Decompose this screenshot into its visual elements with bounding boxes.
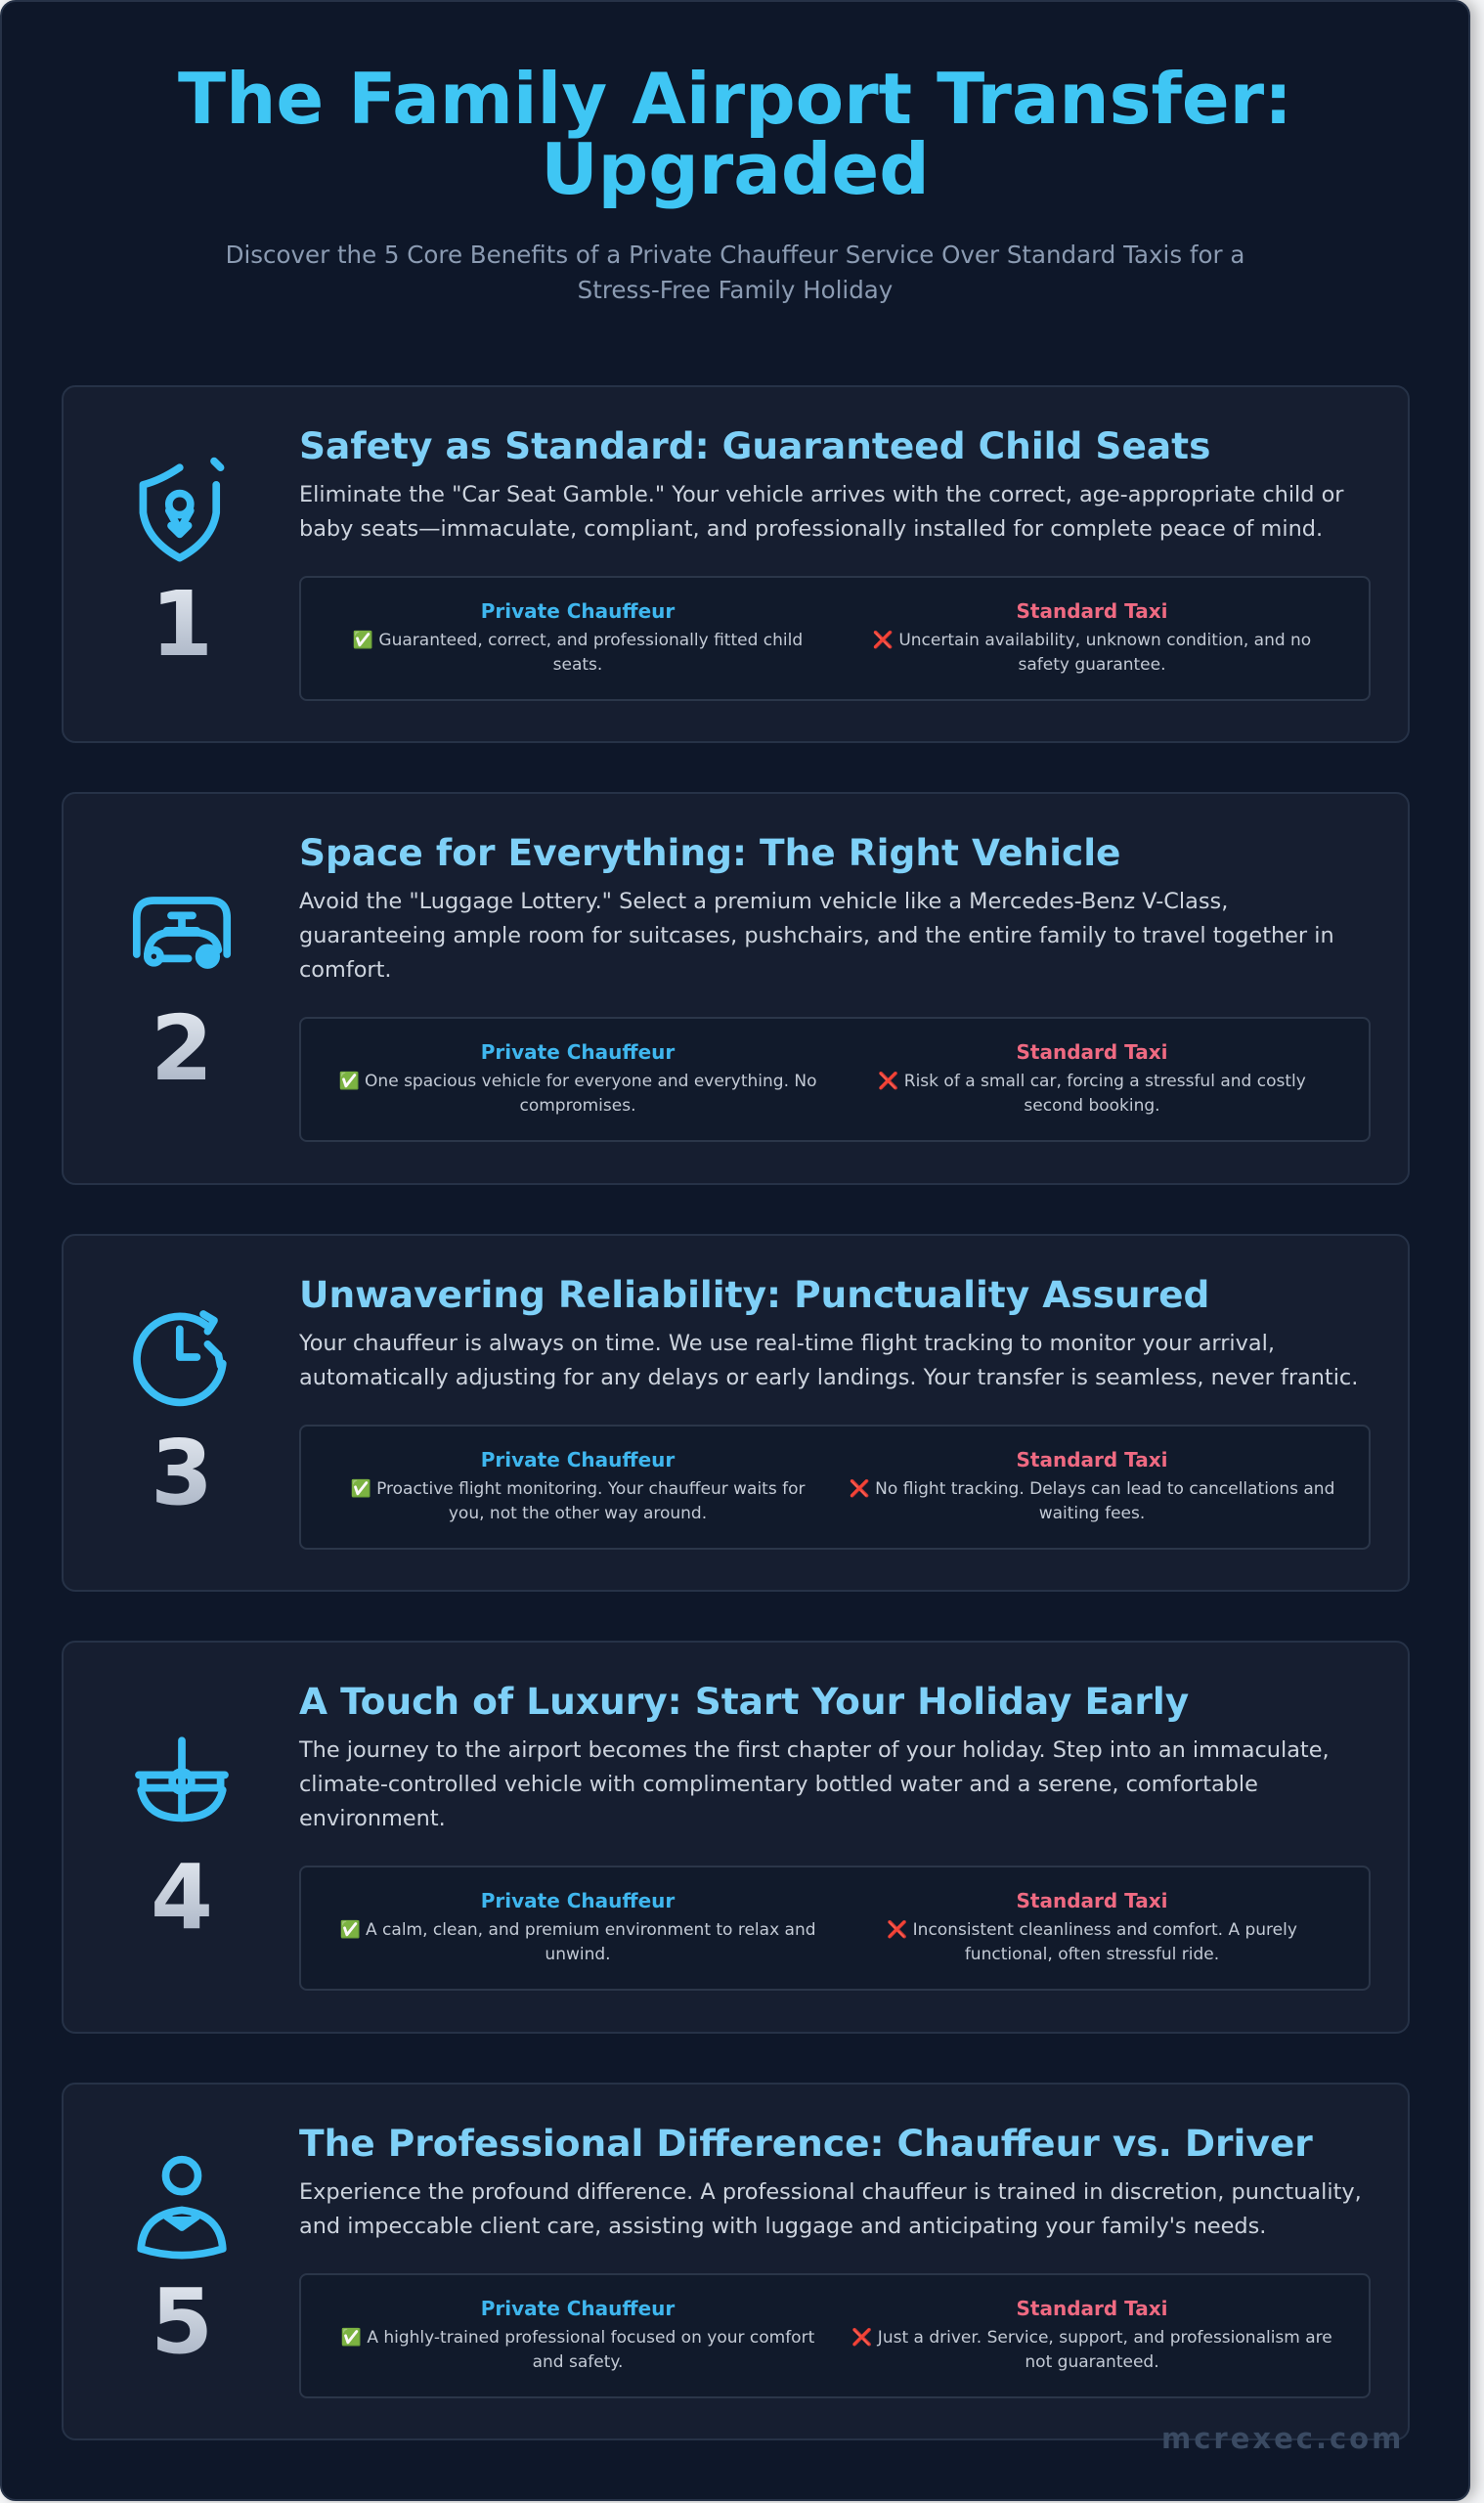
text block: Your chauffeur is always on time. We use real-time flight tracking to monitor your arrival, automatically adjusting for any delays or early landings. Your transfer is seamless, never frantic. <box>299 1331 1358 1390</box>
text block: Experience the profound difference. A professional chauffeur is trained in discretion, punctuality, and impeccable client care, assisting with luggage and anticipating your family's needs. <box>299 2179 1362 2239</box>
comparison box: Private Chauffeur <box>481 599 675 623</box>
comparison box: ❌ Inconsistent cleanliness and comfort. A purely functional, often stressful ride. <box>887 1920 1297 1964</box>
comparison box <box>299 2273 1371 2398</box>
panel: card 4 <box>62 1641 1410 2034</box>
text block: Eliminate the "Car Seat Gamble." Your vehicle arrives with the correct, age-appropriate child or baby seats—immaculate, compliant, and professionally installed for complete peace of mind. <box>299 482 1343 542</box>
watermark: mcrexec.com <box>1161 2422 1404 2455</box>
panel: card 3 <box>62 1234 1410 1592</box>
comparison box: Standard Taxi <box>1017 599 1167 623</box>
title <box>178 58 1292 210</box>
comparison box: Private Chauffeur <box>481 2297 675 2320</box>
text block: Avoid the "Luggage Lottery." Select a premium vehicle like a Mercedes-Benz V-Class, guaranteeing ample room for suitcases, pushchairs, and the entire family to travel together in comfort. <box>299 889 1334 983</box>
comparison box: Standard Taxi <box>1017 1040 1167 1064</box>
comparison box <box>299 1425 1371 1550</box>
text block <box>299 2122 1371 2398</box>
comparison box: ❌ No flight tracking. Delays can lead to cancellations and waiting fees. <box>850 1479 1334 1523</box>
text block: Space for Everything: The Right Vehicle <box>299 831 1120 874</box>
icon: shield with number 1 <box>139 458 225 677</box>
comparison box <box>299 576 1371 701</box>
text block: The Professional Difference: Chauffeur vs. Driver <box>299 2122 1313 2165</box>
text block: The journey to the airport becomes the first chapter of your holiday. Step into an immaculate, climate-controlled vehicle with complimentary bottled water and a serene, comfortable environment. <box>299 1737 1330 1831</box>
text block: Unwavering Reliability: Punctuality Assured <box>299 1273 1209 1316</box>
text block <box>299 831 1371 1142</box>
text block: Safety as Standard: Guaranteed Child Seats <box>299 424 1210 467</box>
comparison box: ✅ Guaranteed, correct, and professionally fitted child seats. <box>353 631 803 675</box>
subtitle: Discover the 5 Core Benefits of a Private Chauffeur Service Over Standard Taxis for a Stress-Free Family Holiday <box>226 241 1244 304</box>
panel: card 2 <box>62 792 1410 1185</box>
icon: clock with number 3 <box>133 1310 227 1525</box>
title: The Family Airport Transfer: <box>178 58 1292 140</box>
comparison box: ✅ Proactive flight monitoring. Your chauffeur waits for you, not the other way around. <box>350 1479 806 1523</box>
comparison box: ❌ Risk of a small car, forcing a stressful and costly second booking. <box>878 1072 1306 1116</box>
icon: clock with number 3: 3 <box>151 1421 213 1525</box>
icon: shield with number 1: 1 <box>151 572 213 677</box>
comparison box: Private Chauffeur <box>481 1040 675 1064</box>
comparison box <box>299 1017 1371 1142</box>
comparison box: Private Chauffeur <box>481 1448 675 1471</box>
title: Upgraded <box>541 128 930 210</box>
comparison box: ✅ A highly-trained professional focused on your comfort and safety. <box>341 2328 814 2372</box>
icon: person with number 5 <box>137 2155 227 2374</box>
comparison box: Standard Taxi <box>1017 1889 1167 1912</box>
panel: card 1 <box>62 385 1410 743</box>
panel: card 5 <box>62 2083 1410 2440</box>
icon: vehicle with number 2: 2 <box>151 996 213 1101</box>
comparison box: ✅ A calm, clean, and premium environment to relax and unwind. <box>339 1920 816 1964</box>
icon: luxury bowl with number 4 <box>135 1736 229 1950</box>
icon: luxury bowl with number 4: 4 <box>151 1845 213 1950</box>
icon: person with number 5: 5 <box>151 2269 213 2374</box>
text block: A Touch of Luxury: Start Your Holiday Early <box>299 1680 1189 1723</box>
text block <box>299 424 1371 701</box>
icon: vehicle with number 2 <box>133 897 231 1101</box>
comparison box: ❌ Just a driver. Service, support, and professionalism are not guaranteed. <box>851 2328 1332 2372</box>
text block <box>299 1273 1371 1550</box>
comparison box <box>299 1866 1371 1991</box>
comparison box: ❌ Uncertain availability, unknown condition, and no safety guarantee. <box>873 631 1311 675</box>
comparison box: ✅ One spacious vehicle for everyone and everything. No compromises. <box>338 1072 817 1116</box>
comparison box: Private Chauffeur <box>481 1889 675 1912</box>
comparison box: Standard Taxi <box>1017 2297 1167 2320</box>
text block <box>299 1680 1371 1991</box>
comparison box: Standard Taxi <box>1017 1448 1167 1471</box>
